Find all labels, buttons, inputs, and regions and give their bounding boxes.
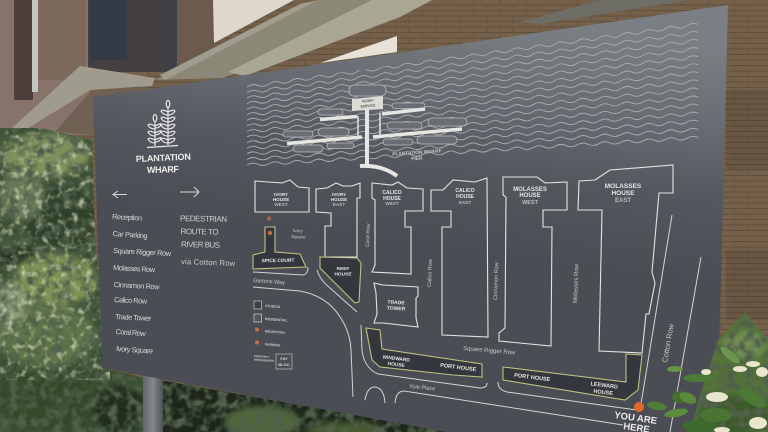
building labels: HOUSE — [331, 197, 347, 202]
building labels: WEST — [385, 201, 399, 206]
bushes below the sign — [163, 380, 444, 432]
building labels: MOLASSES — [513, 187, 547, 193]
building labels: EAST — [459, 200, 471, 205]
dark brick bay — [88, 0, 164, 72]
building labels: LEEWARD — [590, 381, 618, 391]
right brick shading — [726, 90, 768, 170]
building labels: TRADE — [387, 300, 405, 306]
plant icon — [147, 100, 178, 148]
flowering shrub right — [646, 310, 768, 432]
brick upper band tint — [520, 0, 690, 24]
street labels — [253, 223, 676, 392]
directory list left: Coral Row — [115, 327, 147, 338]
building labels: HOUSE — [611, 190, 635, 197]
building labels: EAST — [333, 202, 345, 207]
logo — [136, 100, 191, 175]
building labels: HOUSE — [593, 389, 614, 397]
building labels: PORT HOUSE — [514, 373, 551, 383]
building labels: SPICE COURT — [262, 258, 294, 264]
directory list left: Cinnamon Row — [113, 280, 160, 291]
calico house west — [372, 182, 423, 274]
pier label: PLANTATION WHARF — [392, 148, 442, 158]
directory list right — [180, 214, 236, 268]
building labels: PORT HOUSE — [440, 363, 477, 373]
directory list right: via Cotton Row — [181, 257, 236, 268]
street labels: Cotton Row — [660, 323, 676, 363]
ivory house east — [316, 183, 360, 257]
building outlines — [255, 165, 673, 353]
building labels: IVORY — [274, 192, 288, 197]
directory list left: Trade Tower — [115, 312, 152, 323]
building labels — [262, 183, 642, 397]
leaves — [646, 344, 768, 432]
brick wall left — [0, 0, 90, 135]
trade tower — [374, 283, 418, 327]
legend text: PARKING — [265, 343, 281, 348]
building labels: REEF — [337, 266, 349, 272]
directory list right: PEDESTRIAN — [180, 214, 227, 224]
legend text: RECEPTION — [265, 330, 285, 335]
left arrow — [113, 191, 127, 198]
right arrow — [180, 187, 199, 197]
molasses house west — [499, 177, 567, 346]
street labels: Coral Row — [365, 223, 372, 247]
building labels: EAST — [615, 198, 631, 204]
building labels: WINDWARD — [382, 354, 411, 364]
fay bloc logo: FAY — [280, 356, 288, 361]
legend text: MANAGEMENT — [254, 358, 275, 363]
building labels: HOUSE — [383, 196, 402, 202]
sign post — [143, 372, 163, 432]
calico house east — [431, 178, 488, 337]
port house and leeward house — [503, 354, 642, 400]
ferry service box — [352, 96, 383, 111]
fay bloc logo — [276, 354, 292, 369]
directory list left — [112, 212, 172, 356]
stone cornice — [155, 0, 432, 80]
pale wall panel — [320, 36, 397, 63]
ivory house west — [255, 180, 309, 212]
building labels: CALICO — [382, 190, 402, 196]
you are here marker: YOU ARE — [614, 410, 658, 427]
pale panel — [213, 0, 294, 43]
you are here marker — [614, 402, 658, 432]
building labels: HOUSE — [519, 193, 541, 199]
directory list right: RIVER BUS — [181, 240, 220, 250]
directory list left: Reception — [112, 212, 142, 223]
ferry service box: FERRY — [362, 98, 375, 104]
parking marker — [268, 231, 272, 235]
building labels: WEST — [522, 200, 539, 206]
directory list left: Car Parking — [112, 229, 148, 240]
street labels: York Place — [409, 384, 435, 392]
street labels: Molasses Row — [573, 263, 580, 303]
street labels: Calico Row — [427, 259, 434, 287]
street labels: Cinnamon Row — [493, 262, 500, 300]
stone ledge — [12, 66, 155, 130]
pier label: PIER — [411, 156, 423, 162]
wordmark — [136, 152, 191, 175]
building labels: MOLASSES — [605, 183, 642, 190]
directory list right: ROUTE TO — [180, 227, 219, 237]
wordmark: WHARF — [147, 164, 180, 175]
spice court and reef house — [253, 227, 642, 400]
legend swatches — [254, 301, 262, 309]
building labels: TOWER — [387, 306, 406, 313]
building labels: HOUSE — [387, 361, 406, 369]
wordmark: PLANTATION — [136, 152, 191, 164]
pier label — [392, 148, 442, 162]
legend text: PROPERTY — [254, 354, 270, 359]
windward house and port house — [366, 328, 482, 377]
street labels: Gartons Way — [253, 278, 285, 286]
directory list left: Molasses Row — [113, 263, 156, 274]
hedge left — [0, 120, 150, 432]
pier walkways — [287, 108, 462, 176]
building labels: HOUSE — [273, 197, 289, 202]
reef house — [320, 257, 361, 303]
street labels: Square — [291, 234, 306, 240]
legend text — [254, 304, 288, 363]
water pattern — [247, 23, 698, 166]
building labels: IVORY — [332, 192, 346, 197]
ferry service box: SERVICE — [360, 103, 376, 109]
roads — [253, 215, 701, 432]
building labels: CALICO — [455, 188, 475, 194]
white flowers — [701, 361, 768, 432]
map markers — [267, 216, 271, 221]
building labels: WEST — [274, 202, 288, 207]
window left — [14, 0, 33, 100]
moored boats — [283, 85, 467, 152]
directory list left: Ivory Square — [116, 344, 153, 356]
building labels: HOUSE — [456, 194, 475, 200]
fay bloc logo: BLOC — [278, 362, 290, 367]
directory list left: Calico Row — [114, 295, 148, 306]
molasses house east — [578, 165, 673, 353]
street labels: Ivory — [293, 228, 304, 233]
pier — [283, 85, 467, 176]
building labels: HOUSE — [334, 272, 352, 278]
legend text: RESIDENTIAL — [265, 317, 288, 323]
directory list left: Square Rigger Row — [113, 246, 172, 258]
legend — [254, 301, 292, 369]
street labels: Square Rigger Row — [463, 346, 516, 357]
spice court — [253, 227, 306, 269]
legend text: STUDIOS — [265, 304, 281, 309]
